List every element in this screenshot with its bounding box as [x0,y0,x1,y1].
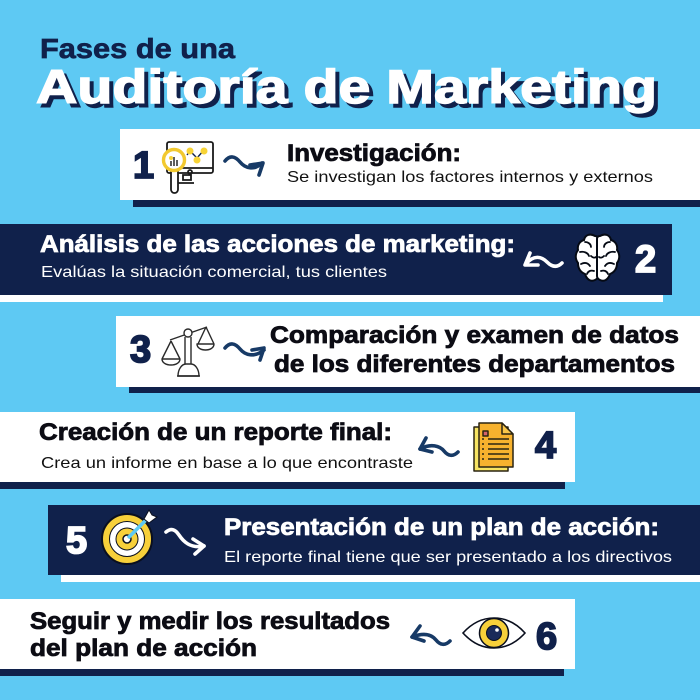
title line 2: Auditoría de Marketing [36,60,657,113]
heading: step 3: Comparación y examen de datos [270,322,679,349]
title line 2 shadow: Auditoría de Marketing [40,64,661,117]
panel: step 5 [48,505,700,582]
panel: step 3 [116,316,700,393]
arrow: step 4 [420,438,458,455]
arrow: step 3 [225,344,264,360]
text: step 1: Se investigan los factores internos y externos [287,169,653,186]
panel: step 1 [120,129,700,207]
text: step 2: Evalúas la situación comercial, tus clientes [41,264,387,281]
arrow: step 5 [166,530,204,554]
arrow: step 1 [225,157,263,175]
heading: step 3 [270,322,679,378]
text: step 4: Crea un informe en base a lo que encontraste [41,455,413,472]
text: step 5: El reporte final tiene que ser presentado a los directivos [224,549,672,566]
icon: target with dart [102,510,157,564]
icon: monitor with magnifier [164,142,213,193]
number 4: 4 [535,425,556,467]
icon: eye [463,618,525,648]
icon: brain [576,235,619,281]
number 3: 3 [130,329,151,371]
arrow: step 2 [525,253,562,266]
heading: step 5: Presentación de un plan de acción: [224,514,659,541]
number 5: 5 [66,520,87,562]
panel: step 4 [0,412,575,489]
title line 1: Fases de una [40,33,235,64]
icon: document [474,423,513,471]
heading: step 1: Investigación: [287,140,461,167]
number 1: 1 [133,145,154,187]
heading: step 6: del plan de acción [30,635,257,662]
heading: step 4: Creación de un reporte final: [39,419,392,446]
panel: step 2 [0,224,672,302]
heading: step 6: Seguir y medir los resultados [30,608,390,635]
title [36,33,661,117]
heading: step 2: Análisis de las acciones de marketing: [40,231,515,258]
icon: scales [162,327,214,376]
heading: step 3: de los diferentes departamentos [274,351,675,378]
arrow: step 6 [412,626,450,644]
panel: step 6 [0,599,575,676]
number 6: 6 [536,616,557,658]
heading: step 6 [30,608,390,662]
number 2: 2 [635,239,656,281]
